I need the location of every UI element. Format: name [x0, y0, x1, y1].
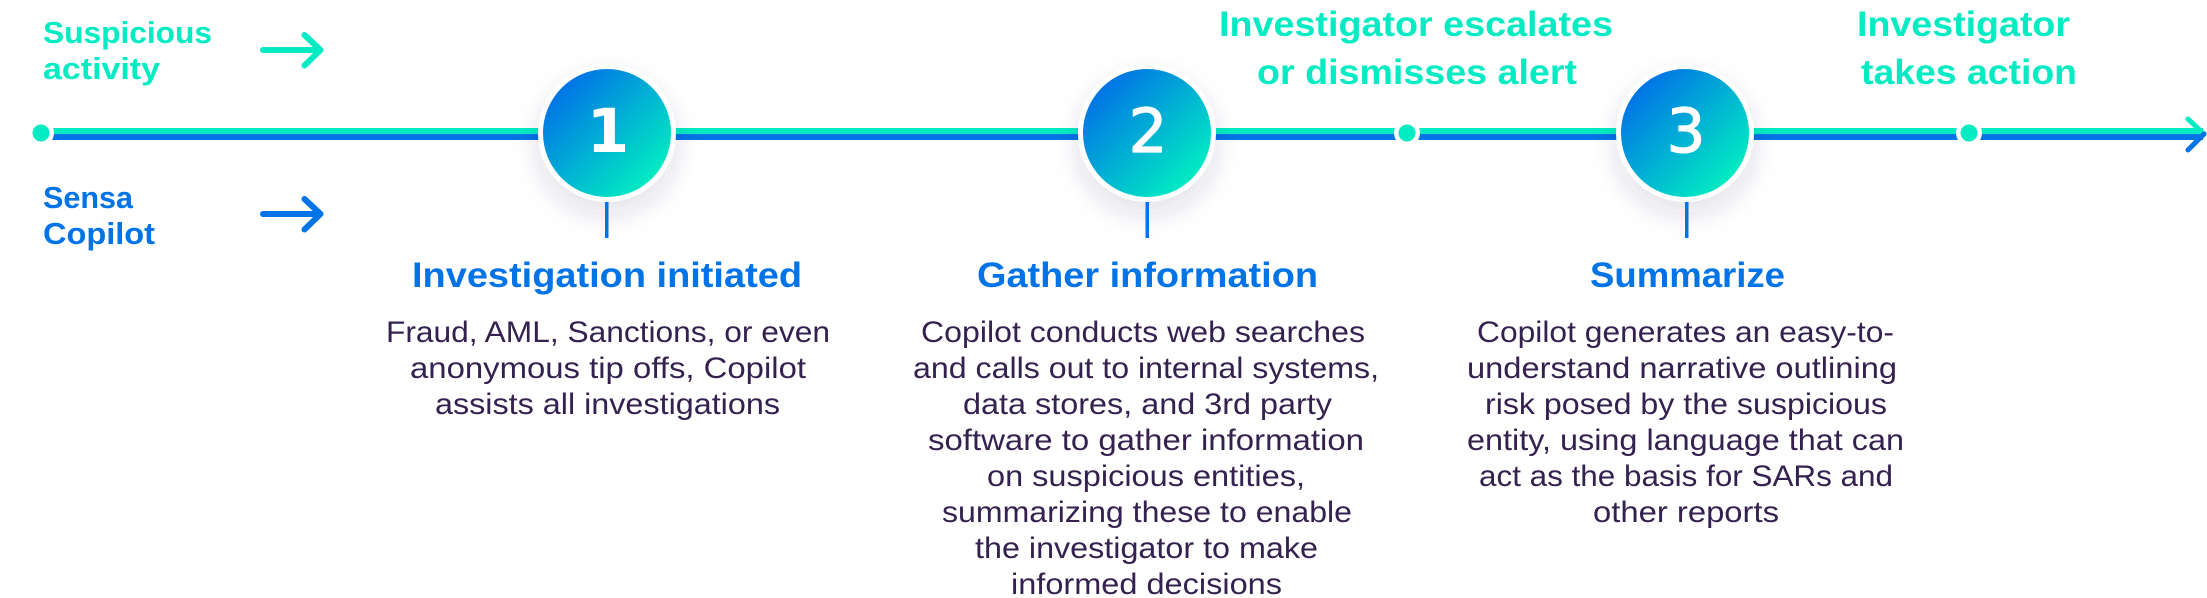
step 3: description: understand narrative outlining [1467, 352, 1897, 385]
step 3: description: risk posed by the suspicious [1485, 388, 1887, 421]
step 1: connector [605, 202, 608, 238]
label: Investigator takes action: Investigator [1857, 5, 2070, 44]
step 3: description: act as the basis for SARs and [1479, 460, 1893, 493]
step 1: heading: Investigation initiated [412, 256, 802, 295]
label: Sensa Copilot: Copilot [43, 216, 155, 251]
step 2: connector [1146, 202, 1149, 238]
label: Sensa Copilot: Sensa [43, 180, 134, 215]
label: Investigator escalates or dismisses alert: Investigator escalates [1219, 5, 1613, 44]
step 3: description: Copilot generates an easy-to- [1477, 316, 1894, 349]
step 2: badge [1078, 64, 1216, 202]
step 2: description: Copilot conducts web searches [921, 316, 1365, 349]
step 2: description: on suspicious entities, [987, 460, 1305, 493]
step 2: description: summarizing these to enable [942, 496, 1352, 529]
step 2: description: the investigator to make [975, 532, 1318, 565]
step 1: description: Fraud, AML, Sanctions, or even [386, 316, 830, 349]
step 1: description [386, 316, 830, 421]
label: Investigator escalates or dismisses alert: or dismisses alert [1257, 53, 1577, 92]
step 2: description: and calls out to internal systems, [913, 352, 1379, 385]
step 3: description: entity, using language that can [1467, 424, 1904, 457]
step 2: badge: 2 [1129, 96, 1167, 167]
timeline: two-tone line with end arrow [41, 119, 2204, 150]
label: Sensa Copilot [43, 180, 155, 251]
label: Investigator escalates or dismisses alert [1219, 5, 1613, 92]
step 2: description: data stores, and 3rd party [963, 388, 1332, 421]
label: Investigator takes action [1857, 5, 2077, 92]
label: Investigator takes action: takes action [1861, 53, 2077, 92]
step 3: description [1467, 316, 1904, 529]
step 1: badge: 1 [587, 96, 629, 167]
step 3: description: other reports [1593, 496, 1779, 529]
icon: blue arrow [263, 199, 320, 230]
step 2: description [913, 316, 1379, 598]
start dot [28, 120, 54, 146]
step 3: connector [1685, 202, 1688, 238]
step 1: description: anonymous tip offs, Copilot [410, 352, 806, 385]
dot: takes action [1956, 120, 1982, 146]
step 3: heading: Summarize [1590, 256, 1785, 295]
label: Suspicious activity: activity [43, 51, 161, 86]
step 2: heading: Gather information [977, 256, 1318, 295]
dot: escalates [1394, 120, 1420, 146]
step 1: description: assists all investigations [435, 388, 780, 421]
step 3: badge [1616, 64, 1754, 202]
label: Suspicious activity: Suspicious [43, 15, 212, 50]
step 1: badge [538, 64, 676, 202]
step 3: badge: 3 [1667, 96, 1705, 167]
label: Suspicious activity [43, 15, 212, 86]
icon: teal arrow [263, 35, 320, 66]
step 2: description: software to gather information [928, 424, 1364, 457]
